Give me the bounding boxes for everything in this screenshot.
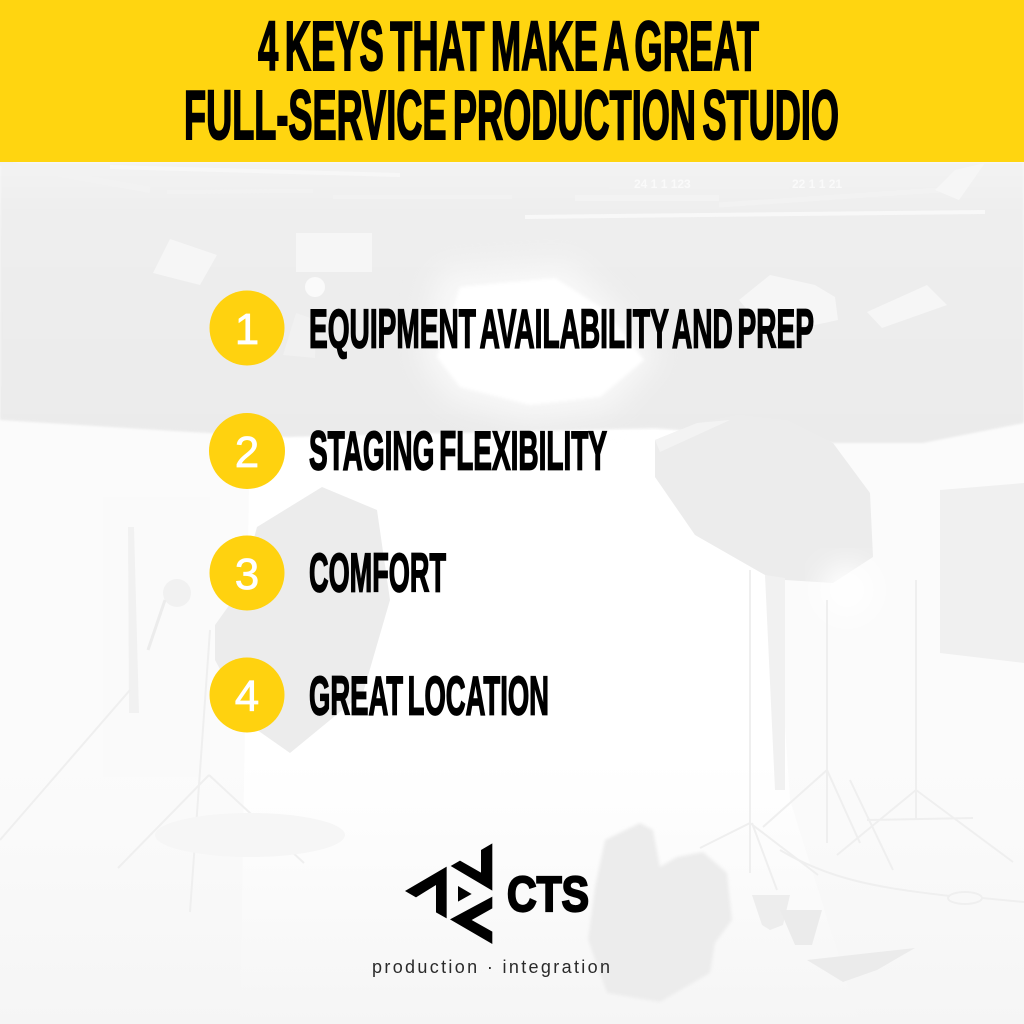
title [184,7,839,154]
text: GREAT LOCATION [309,664,549,726]
list item 2: STAGING FLEXIBILITY [309,420,607,482]
list item 1 [210,290,814,366]
logo: CTS: CTS [507,868,589,922]
list item 1: 1 [235,305,259,354]
logo: CTS: production · integration [372,957,610,977]
header band [0,0,1024,162]
list item 3: 3 [235,550,259,599]
list item 4: 4 [235,672,259,721]
background: faded studio photo: 22 1 1 21 [792,177,842,191]
logo: CTS [372,843,610,977]
text: COMFORT [309,542,446,604]
list item 3 [210,536,446,610]
background: faded studio photo: 24 1 1 123 [634,177,691,191]
list item 4 [210,658,549,732]
list item 2: 2 [235,428,259,477]
list item 2 [209,413,607,489]
icon: triangular arrows mark [405,843,492,944]
